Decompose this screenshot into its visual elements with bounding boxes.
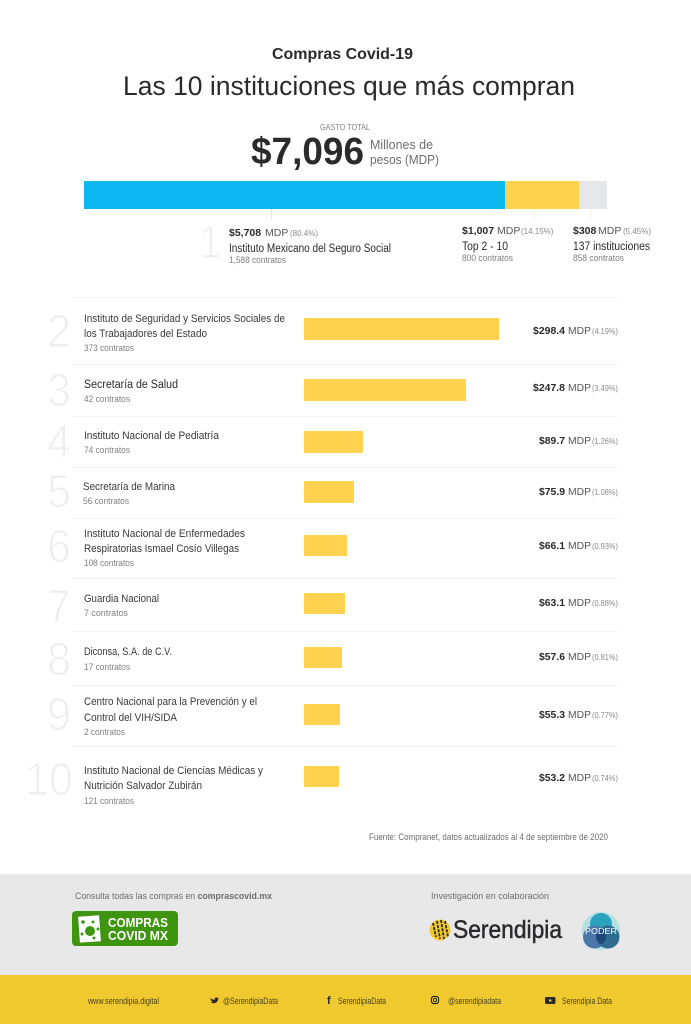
icon: Compras Covid MX logo: COVID MX (108, 928, 168, 943)
row 6: 108 contratos (84, 558, 134, 568)
row 3: 42 contratos (84, 394, 130, 404)
row 8: 17 contratos (84, 662, 130, 672)
row 2: MDP (568, 325, 591, 337)
title: Las 10 instituciones que más compran (123, 71, 575, 101)
row 10: (0.74%) (592, 774, 618, 783)
row 3 (47, 364, 618, 416)
row 7: $63.1 (539, 597, 565, 609)
row 2: los Trabajadores del Estado (84, 328, 207, 340)
row 9: (0.77%) (592, 711, 618, 720)
row 9: Centro Nacional para la Prevención y el (84, 696, 257, 708)
top 2-10: MDP (497, 225, 520, 237)
137 other institutions: MDP (598, 225, 621, 237)
row 6: Instituto Nacional de Enfermedades (84, 528, 245, 540)
row 9 (47, 688, 618, 740)
stacked total bar (84, 181, 607, 220)
row 7: MDP (568, 597, 591, 609)
137 other institutions: 858 contratos (573, 253, 624, 263)
total spending heading (251, 123, 439, 173)
row 2: $298.4 (533, 325, 565, 337)
twitter handle: @SerendipiaData (223, 996, 278, 1006)
collaboration text: Investigación en colaboración (431, 891, 549, 902)
row 2: 2 (47, 305, 71, 357)
row 5 (47, 465, 618, 517)
total spending heading: $7,096 (251, 131, 364, 173)
137 other institutions: (5.45%) (623, 227, 651, 236)
row 8: MDP (568, 651, 591, 663)
row 3: $247.8 (533, 382, 565, 394)
row 8: Diconsa, S.A. de C.V. (84, 646, 172, 658)
row 3: (3.49%) (592, 384, 618, 393)
row 5: 56 contratos (83, 496, 129, 506)
row 9: $55.3 (539, 709, 565, 721)
row 8 (47, 633, 618, 685)
row 3: Secretaría de Salud (84, 379, 178, 391)
rank 1: IMSS: Instituto Mexicano del Seguro Social (229, 243, 391, 255)
rank 1: IMSS: MDP (265, 227, 288, 239)
top 2-10: (14.15%) (521, 227, 554, 236)
facebook name: SerendipiaData (338, 996, 386, 1006)
row 8: $57.6 (539, 651, 565, 663)
top 2-10: $1,007 (462, 225, 494, 237)
rank 1: IMSS: (80.4%) (290, 229, 318, 238)
icon: PODER logo (582, 912, 620, 950)
row 6: 6 (47, 520, 71, 572)
row 7: (0.88%) (592, 599, 618, 608)
rank 1: IMSS: 1 (199, 216, 221, 268)
row 10 (25, 753, 618, 806)
icon: facebook: f (327, 995, 331, 1007)
top 2-10: 800 contratos (462, 253, 513, 263)
row 4 (47, 415, 618, 467)
row 10: 10 (25, 753, 73, 805)
title: Compras Covid-19 (272, 46, 413, 63)
row 9: 2 contratos (84, 727, 125, 737)
icon: Compras Covid MX logo: COMPRAS (108, 915, 168, 930)
row 5: 5 (47, 465, 71, 517)
row 6 (47, 520, 618, 572)
icon: Compras Covid MX logo (72, 911, 178, 946)
row 10: MDP (568, 772, 591, 784)
row 5: $75.9 (539, 486, 565, 498)
row 8: (0.81%) (592, 653, 618, 662)
panel: yellow social bar (0, 975, 691, 1024)
rank 1: IMSS (199, 216, 391, 268)
row 7: 7 contratos (84, 608, 128, 618)
row 2: 373 contratos (84, 343, 134, 353)
total spending heading: GASTO TOTAL (320, 123, 370, 132)
title (123, 46, 575, 101)
row 9: Control del VIH/SIDA (84, 712, 178, 724)
row 7: Guardia Nacional (84, 593, 159, 605)
consult text: Consulta todas las compras en comprascovid.mx (75, 891, 273, 902)
137 other institutions (573, 225, 651, 263)
icon: youtube (545, 997, 556, 1004)
website: www.serendipia.digital (87, 996, 159, 1006)
top 2-10 (462, 225, 554, 263)
row 3: 3 (47, 364, 71, 416)
total spending heading: pesos (MDP) (370, 152, 439, 167)
icon: twitter (210, 997, 219, 1003)
top 2-10: Top 2 - 10 (462, 241, 508, 253)
icon: instagram (432, 996, 438, 1004)
row 7 (47, 580, 618, 632)
row 10: $53.2 (539, 772, 565, 784)
137 other institutions: $308 (573, 225, 597, 237)
row 6: (0.93%) (592, 542, 618, 551)
row 8: 8 (47, 633, 71, 685)
row 4: $89.7 (539, 435, 565, 447)
row 7: 7 (47, 580, 71, 632)
row 5: Secretaría de Marina (83, 481, 176, 493)
row 9: 9 (47, 688, 71, 740)
row 4: Instituto Nacional de Pediatría (84, 430, 220, 442)
row 4: MDP (568, 435, 591, 447)
row 2 (47, 305, 618, 357)
instagram handle: @serendipiadata (448, 996, 501, 1006)
row 4: (1.26%) (592, 437, 618, 446)
row 9: MDP (568, 709, 591, 721)
row 3: MDP (568, 382, 591, 394)
row 10: 121 contratos (84, 796, 134, 806)
total spending heading: Millones de (370, 137, 433, 152)
rank 1: IMSS: $5,708 (229, 227, 261, 239)
row 5: MDP (568, 486, 591, 498)
panel: grey footer (0, 874, 691, 976)
row 2: (4.19%) (592, 327, 618, 336)
row 4: 74 contratos (84, 445, 130, 455)
youtube name: Serendipia Data (562, 996, 612, 1006)
row 10: Instituto Nacional de Ciencias Médicas y (84, 765, 263, 777)
row 6: MDP (568, 540, 591, 552)
source note: Fuente: Compranet, datos actualizados al 4 de septiembre de 2020 (369, 832, 608, 842)
137 other institutions: 137 instituciones (573, 241, 650, 253)
row 10: Nutrición Salvador Zubirán (84, 780, 202, 792)
rank 1: IMSS: 1,588 contratos (229, 255, 286, 265)
row 2: Instituto de Seguridad y Servicios Sociales de (84, 313, 285, 325)
row 5: (1.08%) (592, 488, 618, 497)
row 6: Respiratorias Ismael Cosío Villegas (84, 543, 239, 555)
row 4: 4 (47, 415, 71, 467)
icon: Serendipia logo: Serendipia (453, 916, 562, 944)
row 6: $66.1 (539, 540, 565, 552)
icon: PODER logo: PODER (585, 927, 617, 936)
